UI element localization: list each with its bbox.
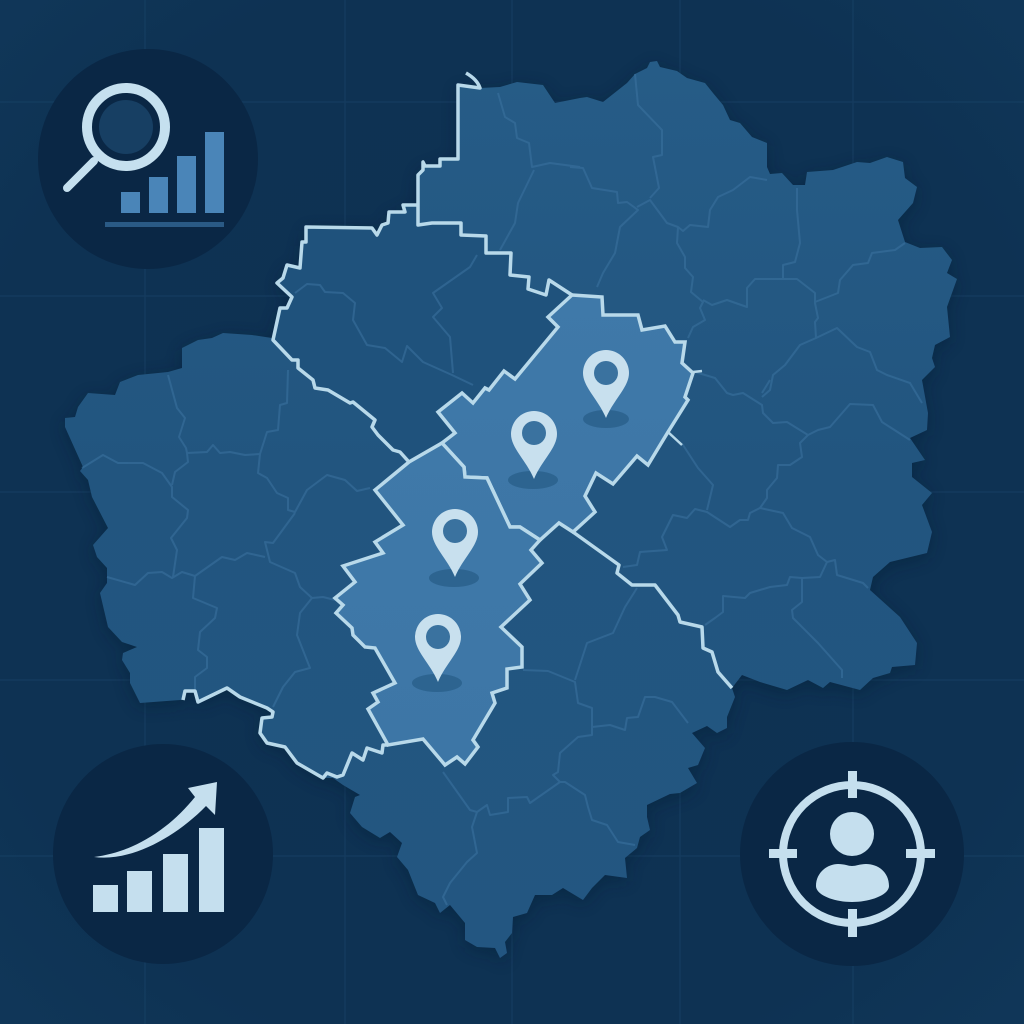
icon: magnifier with bars	[38, 49, 258, 269]
pin: lower bottom	[412, 614, 462, 692]
pin: lower top	[429, 509, 479, 587]
map	[65, 61, 957, 962]
internal boundaries	[82, 74, 922, 905]
pin: upper right	[583, 350, 629, 428]
bright outer boundaries	[183, 73, 732, 778]
icon: growth chart	[53, 744, 273, 964]
highlighted region: upper	[438, 295, 693, 540]
region: north-west	[273, 205, 572, 462]
pin: upper left	[508, 411, 558, 489]
region: full landmass	[65, 61, 957, 958]
icon: target person	[740, 742, 964, 966]
highlighted region: lower	[335, 443, 542, 765]
